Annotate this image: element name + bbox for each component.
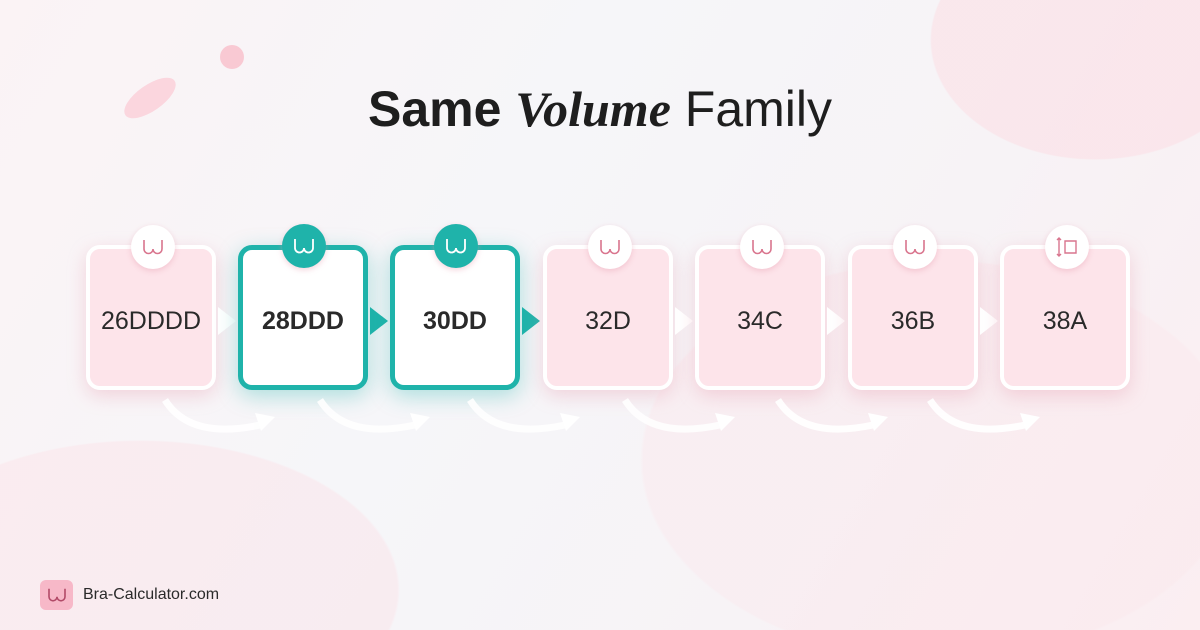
arrow [980, 307, 998, 335]
card: 38A: 38A [1043, 307, 1087, 335]
title: Same Volume Family [368, 81, 832, 137]
card: 32D: 32D [585, 307, 631, 335]
card: 38A [1000, 245, 1130, 390]
card: 34C [695, 245, 825, 390]
logo [40, 580, 219, 610]
card: 28DDD [238, 245, 368, 390]
arrow [218, 307, 236, 335]
card: 34C: 34C [737, 307, 783, 335]
arrow [370, 307, 388, 335]
logo: Bra-Calculator.com [83, 586, 219, 603]
arrow [675, 307, 693, 335]
card: 26DDDD: 26DDDD [101, 307, 201, 335]
card: 30DD: 30DD [423, 307, 487, 335]
card: 32D [543, 245, 673, 390]
card: 26DDDD [86, 245, 216, 390]
card: 36B [848, 245, 978, 390]
card: 36B: 36B [891, 307, 935, 335]
curved arrows [162, 398, 1040, 432]
arrow [827, 307, 845, 335]
arrow [522, 307, 540, 335]
card: 30DD [390, 245, 520, 390]
card: 28DDD: 28DDD [262, 307, 344, 335]
